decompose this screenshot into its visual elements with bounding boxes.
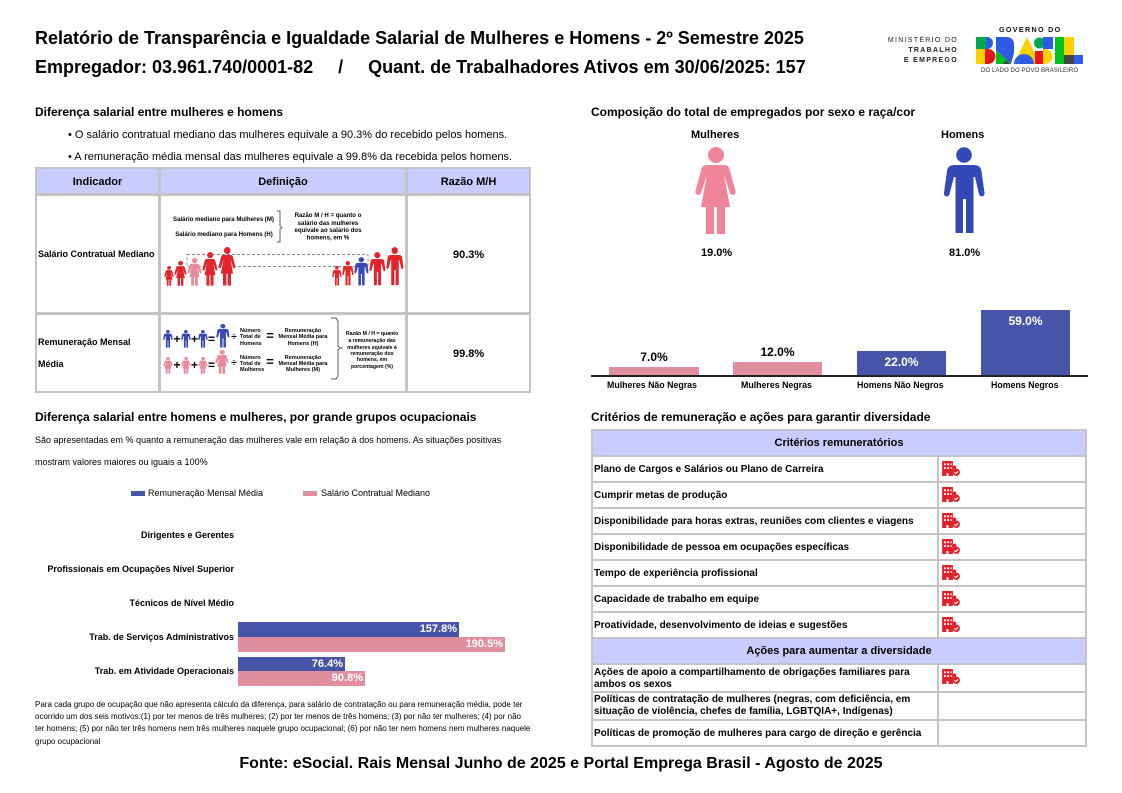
action: obrigações familiares (594, 667, 910, 690)
diagram: salário mediano: equivale ao salário dos (294, 227, 362, 234)
diagram: remuneração média: = (208, 332, 215, 346)
diagram: remuneração média: Homens (240, 341, 262, 347)
row 1 definição (159, 194, 407, 314)
label: técnicos: Técnicos de Nível Médio (129, 598, 234, 608)
bar 90.8%: 90.8% (332, 672, 363, 684)
diagram: remuneração média: Mensal Média para (279, 361, 328, 367)
criterion: trabalho em equipe: Capacidade de trabalho em equipe (594, 594, 759, 605)
diagram: salário mediano: salário das mulheres (298, 220, 359, 227)
logo: ministério: MINISTÉRIO DO (888, 37, 958, 44)
diagram: remuneração média: + (173, 358, 181, 372)
bar 157.8%: 157.8% (420, 623, 457, 635)
header: razão: Razão M/H (441, 176, 496, 188)
diagram: salário mediano: Razão M / H = quanto o (295, 212, 362, 219)
header: razão (406, 167, 531, 195)
diagram: remuneração média (163, 318, 398, 380)
diagram: remuneração média: Mensal Média para (279, 334, 328, 340)
diagram: remuneração média: homens, em (357, 357, 388, 363)
criterion: experiência: Tempo de experiência profissional (594, 568, 758, 579)
category: homens negros: Homens Negros (991, 380, 1058, 390)
diagram: remuneração média: Número (240, 328, 261, 334)
action: contratação: situação de violência, chefes de família, LGBTQIA+, Indígenas) (594, 706, 893, 717)
diagram: remuneração média: Mulheres (240, 367, 264, 373)
label: remuneração mensal média: Média (38, 359, 64, 369)
logo: ministério: TRABALHO (908, 47, 958, 54)
diagram: remuneração média: a remuneração das (348, 338, 396, 344)
diagram: remuneração média: mulheres equivale à (347, 345, 397, 351)
description: São apresentadas em % quanto a remuneração das mulheres vale em relação à dos homens. As situações positivas (35, 435, 501, 445)
diagram: remuneração média: Remuneração (285, 355, 322, 361)
icon: ocupações (942, 539, 960, 554)
heading: diferença salarial: Diferença salarial entre mulheres e homens (35, 105, 283, 119)
row 2 indicador (35, 313, 160, 393)
footnote: Para cada grupo de ocupação que não apresenta cálculo da diferença, para salário de contratação ou para remuneração média, pode ter (35, 700, 522, 709)
category: homens não negros: Homens Não Negros (857, 380, 944, 390)
action: contratação: Políticas de contratação de mulheres (negras, com deficiência, em (594, 694, 910, 705)
label: remuneração mensal média: Remuneração Mensal (38, 337, 131, 347)
icon: obrigações familiares (942, 669, 960, 684)
bar 22.0% (857, 351, 946, 375)
axis (591, 375, 1088, 376)
value: 19.0%: 19.0% (701, 247, 732, 259)
footnote: ocorrido um dos seis motivos:(1) por ter menos de três mulheres; (2) por ter menos de três homens; (3) por não ter mulheres; (4) por não (35, 712, 521, 721)
diagram: remuneração média: Remuneração (285, 328, 322, 334)
value 90.3%: 90.3% (453, 249, 484, 261)
diagram: salário mediano (164, 210, 404, 286)
category: mulheres não negras: Mulheres Não Negras (607, 380, 697, 390)
diagram: remuneração média: + (173, 332, 181, 346)
table: critérios (591, 429, 1087, 747)
criterion: horas extras: Disponibilidade para horas extras, reuniões com clientes e viagens (594, 516, 914, 527)
logo: governo do brasil: GOVERNO DO (999, 25, 1062, 34)
header: definição (159, 167, 407, 195)
value 7.0%: 7.0% (640, 350, 668, 364)
legend (131, 488, 430, 498)
footnote: ter homens; (5) por não ter três homens nem três mulheres naquele grupo ocupacional; (6) por não ter nem homens nem mulheres naquele (35, 724, 530, 733)
description (35, 435, 501, 467)
icon: horas extras (942, 513, 960, 528)
bar 157.8% (238, 622, 459, 637)
diagram: remuneração média: Razão M / H = quanto (346, 331, 398, 337)
diagram: remuneração média: = (266, 354, 274, 369)
header: ações: Ações para aumentar a diversidade (746, 645, 932, 657)
row 1 razão (406, 194, 531, 314)
label: salário contratual mediano: Salário Contratual Mediano (38, 249, 155, 259)
icon: experiência (942, 565, 960, 580)
diagram: remuneração média: Mulheres (M) (286, 367, 320, 373)
action: promoção: Políticas de promoção de mulheres para cargo de direção e gerência (594, 728, 921, 739)
header: definição: Definição (258, 176, 308, 188)
row 2 razão (406, 313, 531, 393)
bar 59.0% (981, 310, 1070, 375)
bar 7.0% (609, 367, 699, 375)
icon: man (944, 147, 984, 233)
header: indicador: Indicador (73, 176, 122, 188)
footnote (35, 700, 530, 746)
logo: ministério (888, 36, 958, 64)
header: critérios remuneratórios (593, 431, 1085, 455)
category: mulheres negras: Mulheres Negras (741, 380, 812, 390)
icon: equipe (942, 591, 960, 606)
icon: plano de cargos (942, 461, 960, 476)
row 1 indicador (35, 194, 160, 314)
employer line: Empregador: 03.961.740/0001-82 / Quant. de Trabalhadores Ativos em 30/06/2025: 157 (35, 57, 806, 77)
value: 81.0%: 81.0% (949, 247, 980, 259)
diagram: salário mediano: homens, em % (307, 234, 350, 242)
heading: composição: Composição do total de empregados por sexo e raça/cor (591, 105, 915, 119)
footnote: grupo ocupacional (35, 737, 100, 746)
criterion: proatividade: Proatividade, desenvolvimento de ideias e sugestões (594, 620, 847, 631)
bullet 2: • A remuneração média mensal das mulheres equivale a 99.8% da recebida pelos homens. (68, 151, 512, 163)
diagram: remuneração média: Número (240, 355, 261, 361)
header: indicador (35, 167, 160, 195)
diagram: remuneração média: ÷ (231, 358, 237, 369)
source footer: Fonte: eSocial. Rais Mensal Junho de 2025 e Portal Emprega Brasil - Agosto de 2025 (239, 755, 883, 772)
label: serviços administrativos: Trab. de Serviços Administrativos (89, 632, 234, 642)
diagram: remuneração média: ÷ (231, 332, 237, 343)
icon: proatividade (942, 617, 960, 632)
label: profissionais: Profissionais em Ocupações Nível Superior (47, 564, 234, 574)
icon: woman (695, 147, 736, 234)
value 12.0%: 12.0% (760, 345, 795, 359)
label: dirigentes: Dirigentes e Gerentes (141, 530, 234, 540)
logo: governo do brasil (976, 25, 1083, 74)
bar 90.8% (238, 671, 365, 686)
bar 76.4%: 76.4% (312, 658, 343, 670)
diagram: salário mediano: Salário mediano para Mulheres (M) (173, 216, 274, 223)
criterion: plano de cargos: Plano de Cargos e Salários ou Plano de Carreira (594, 464, 824, 475)
heading: critérios: Critérios de remuneração e ações para garantir diversidade (591, 410, 930, 424)
bar 190.5%: 190.5% (466, 638, 503, 650)
legend: Remuneração Mensal Média (148, 488, 263, 498)
diagram: remuneração média: = (208, 358, 215, 372)
bar 76.4% (238, 657, 345, 671)
heading: grupos ocupacionais: Diferença salarial entre homens e mulheres, por grande grupos ocupacionais (35, 410, 476, 424)
action: contratação (594, 694, 910, 717)
legend: Salário Contratual Mediano (321, 488, 430, 498)
bar 190.5% (238, 637, 505, 652)
bar 59.0%: 59.0% (1008, 314, 1043, 328)
action: obrigações familiares: ambos os sexos (594, 679, 672, 690)
header: ações (593, 639, 1085, 663)
label: mulheres: Mulheres (691, 129, 739, 141)
title: Relatório de Transparência e Igualdade Salarial de Mulheres e Homens - 2º Semestre 2025 (35, 28, 804, 48)
label: atividade operacionais: Trab. em Atividade Operacionais (95, 666, 234, 676)
race composition chart (591, 310, 1088, 390)
header: critérios remuneratórios: Critérios remuneratórios (774, 437, 903, 449)
table: indicador (35, 167, 531, 393)
criterion: ocupações específicas: Disponibilidade de pessoa em ocupações específicas (594, 542, 849, 553)
bar 22.0%: 22.0% (884, 355, 919, 369)
action: obrigações familiares: Ações de apoio a compartilhamento de obrigações familiares para (594, 667, 910, 678)
label: homens: Homens (941, 129, 984, 141)
label: remuneração mensal média (38, 337, 131, 369)
diagram: remuneração média: + (191, 332, 198, 346)
bullet 1: • O salário contratual mediano das mulheres equivale a 90.3% do recebido pelos homens. (68, 129, 507, 141)
value 99.8%: 99.8% (453, 348, 484, 360)
diagram: remuneração média: = (266, 328, 274, 343)
diagram: remuneração média: Total de (240, 334, 261, 340)
row 2 definição (159, 313, 407, 393)
description: mostram valores maiores ou iguais a 100% (35, 457, 208, 467)
diagram: remuneração média: Total de (240, 361, 261, 367)
diagram: salário mediano: Salário mediano para Homens (H) (175, 231, 273, 238)
criterion: metas de produção: Cumprir metas de produção (594, 490, 727, 501)
bar 12.0% (733, 362, 822, 375)
diagram: remuneração média: + (191, 358, 198, 372)
diagram: remuneração média: Homens (H) (288, 341, 319, 347)
diagram: remuneração média: remuneração dos (350, 351, 394, 357)
logo: ministério: E EMPREGO (904, 57, 958, 64)
diagram: remuneração média: porcentagem (%) (351, 364, 393, 370)
icon: metas (942, 487, 960, 502)
occupational chart (47, 530, 505, 686)
logo: governo do brasil: DO LADO DO POVO BRASILEIRO (981, 67, 1078, 74)
